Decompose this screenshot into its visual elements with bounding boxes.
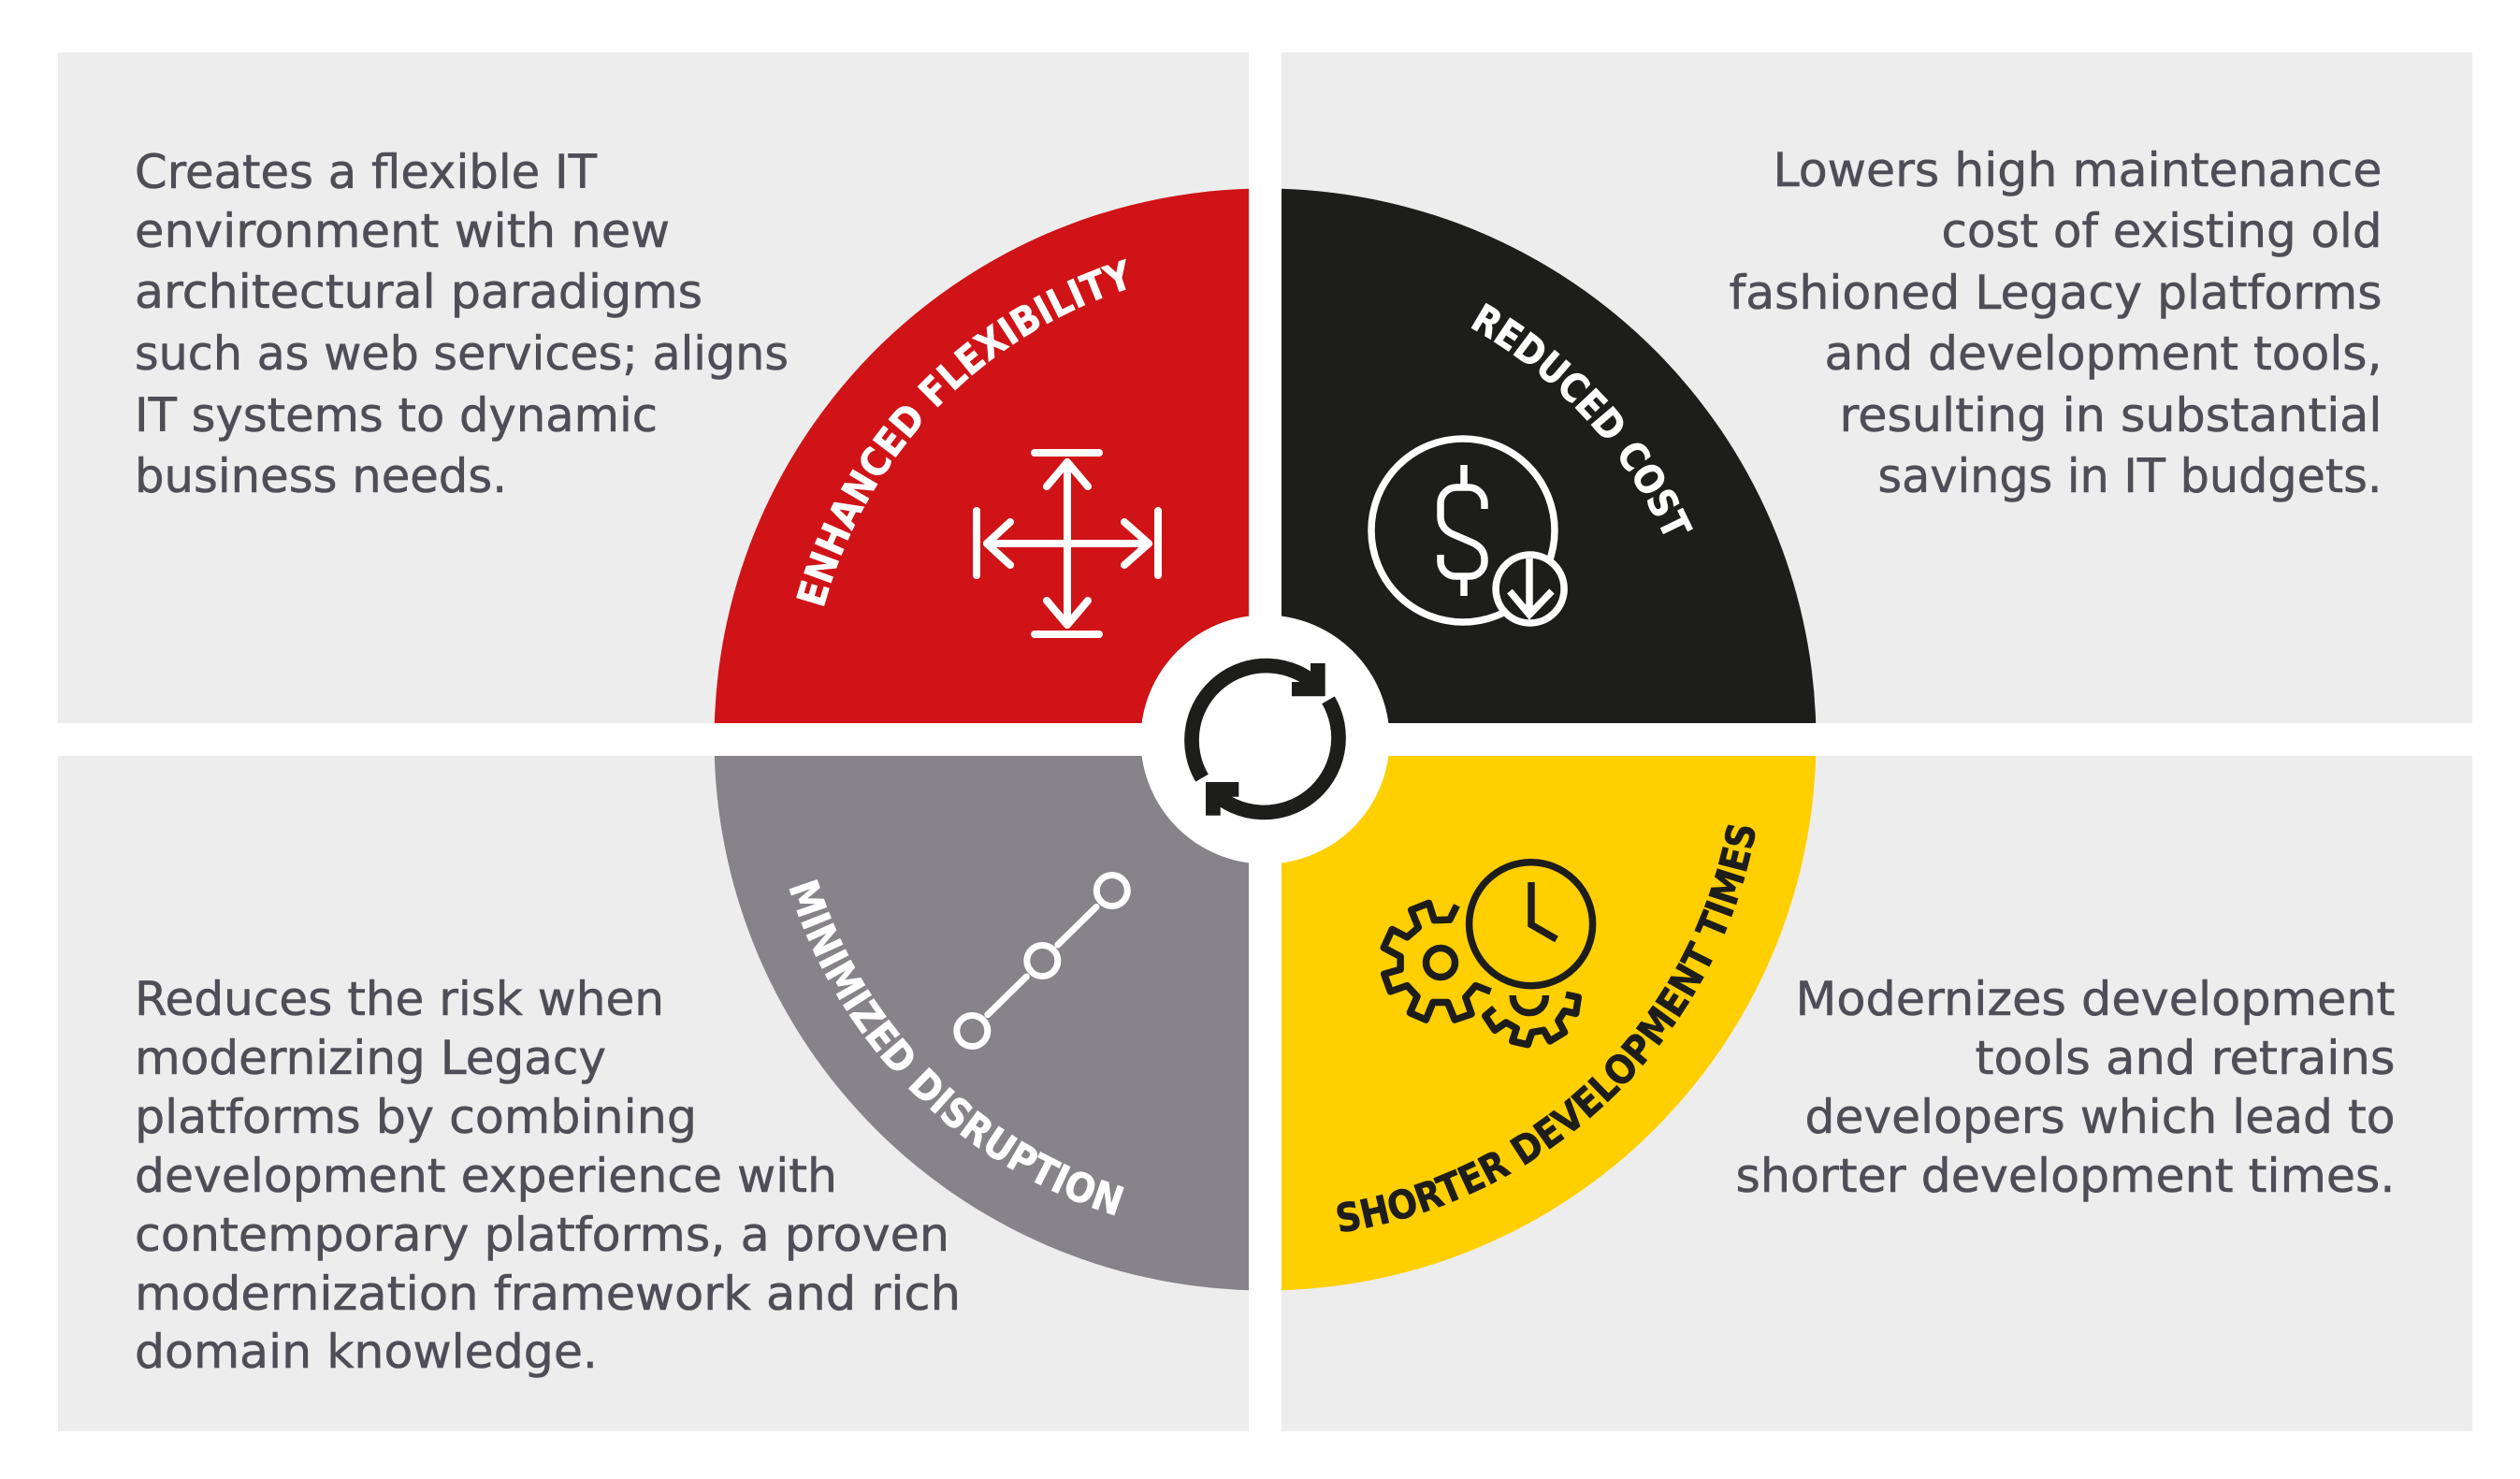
text block: reduced cost description: Lowers high maintenance: [1774, 143, 2382, 197]
text block: reduced cost description: cost of existing old: [1942, 204, 2382, 258]
centre hub: white disc with refresh cycle icon: [1141, 616, 1390, 864]
text block: reduced cost description: and development tools,: [1824, 326, 2382, 381]
text block: shorter development times description: Modernizes development: [1796, 972, 2395, 1026]
text block: enhanced flexibility description: architectural paradigms: [135, 265, 702, 319]
curved heading: minimized disruption: MINIMIZED DISRUPTION: [789, 879, 1124, 1216]
icon: refresh arrows: [1192, 663, 1339, 816]
text block: reduced cost description: fashioned Legacy platforms: [1729, 266, 2382, 320]
text block: reduced cost description: resulting in substantial: [1839, 388, 2382, 442]
text block: minimized disruption description: modernization framework and rich: [135, 1267, 961, 1321]
text block: shorter development times description: tools and retrains: [1976, 1031, 2395, 1085]
text block: enhanced flexibility description: business needs.: [135, 449, 507, 503]
curved heading: reduced cost: REDUCED COST: [1470, 303, 1693, 535]
icon: clock and gears: [1383, 863, 1593, 1045]
text block: shorter development times description: developers which lead to: [1805, 1090, 2395, 1144]
text block: enhanced flexibility description: IT systems to dynamic: [135, 388, 658, 442]
quadrant: enhanced flexibility (red): [715, 189, 1249, 723]
curved heading: enhanced flexibility: ENHANCED FLEXIBILITY: [796, 258, 1126, 606]
text block: minimized disruption description: modernizing Legacy: [135, 1031, 606, 1085]
icon: dollar coin with down arrow: [1371, 439, 1564, 623]
text block: minimized disruption description: Reduces the risk when: [135, 972, 664, 1026]
text block: shorter development times description: [1736, 972, 2395, 1203]
text block: enhanced flexibility description: such as web services; aligns: [135, 326, 789, 381]
quadrant: minimized disruption (grey): [715, 756, 1249, 1291]
text block: minimized disruption description: development experience with: [135, 1149, 837, 1203]
text block: minimized disruption description: platforms by combining: [135, 1090, 697, 1144]
quadrant: reduced cost (black): [1282, 189, 1817, 723]
icon: connected nodes: [957, 876, 1127, 1046]
text block: shorter development times description: shorter development times.: [1736, 1149, 2395, 1203]
panel: bottom right background: [1282, 756, 2472, 1431]
text block: minimized disruption description: contemporary platforms, a proven: [135, 1208, 949, 1262]
icon: four-way expand arrows: [977, 453, 1158, 634]
quadrant: shorter development times (yellow): [1282, 756, 1817, 1291]
panel: top right background: [1282, 52, 2472, 723]
text block: minimized disruption description: [135, 972, 961, 1379]
text block: reduced cost description: [1729, 143, 2382, 503]
curved heading: shorter development times: SHORTER DEVELOPMENT TIMES: [1337, 825, 1755, 1232]
text block: reduced cost description: savings in IT budgets.: [1878, 449, 2382, 503]
text block: minimized disruption description: domain knowledge.: [135, 1325, 598, 1379]
text block: enhanced flexibility description: environment with new: [135, 204, 670, 258]
panel: bottom left background: [58, 756, 1249, 1431]
panel: top left background: [58, 52, 1249, 723]
text block: enhanced flexibility description: [135, 145, 789, 503]
text block: enhanced flexibility description: Creates a flexible IT: [135, 145, 597, 199]
